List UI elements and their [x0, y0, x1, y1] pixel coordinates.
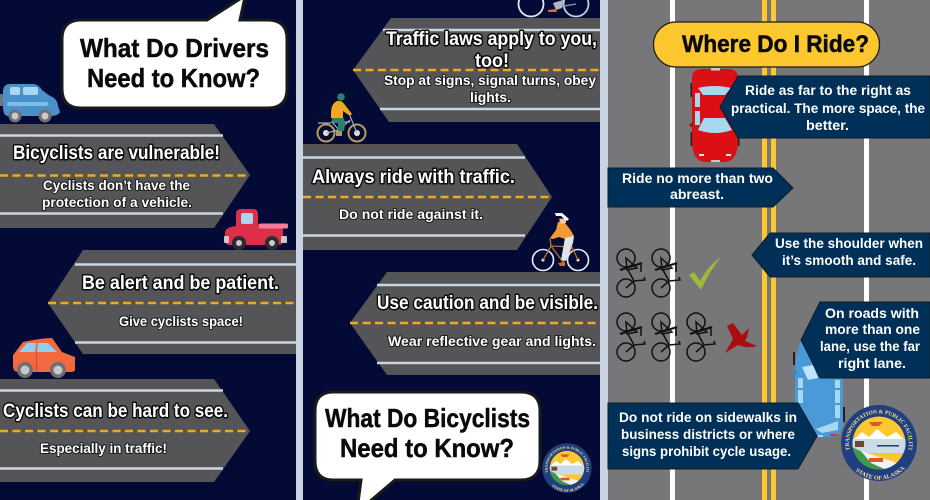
icon: Alaska DOT seal small: STATE OF ALASKA [552, 484, 584, 492]
speech bubble: drivers heading: Need to Know? [87, 63, 260, 93]
icon: Alaska DOT seal large [841, 405, 917, 481]
callout: no sidewalks: Do not ride on sidewalks in [619, 410, 797, 425]
road sign: bicyclists are vulnerable [0, 124, 250, 228]
road sign: cyclists can be hard to see: Especially in traffic! [40, 441, 167, 456]
callout: two abreast: Ride no more than two [622, 171, 773, 186]
road sign: traffic laws apply: Stop at signs, signal turns, obey [384, 72, 596, 88]
icon: red X mark [725, 323, 757, 353]
icon: cyclist in yellow jacket [318, 93, 366, 142]
callout: use the shoulder: it’s smooth and safe. [782, 253, 916, 268]
road sign: cyclists can be hard to see [0, 379, 250, 482]
road sign: always ride with traffic: Always ride with traffic. [312, 167, 515, 188]
heading pill: where do I ride: Where Do I Ride? [682, 31, 869, 58]
icon: Alaska DOT seal large: STATE OF ALASKA [856, 466, 905, 480]
road sign: use caution and be visible: Wear reflective gear and lights. [388, 334, 596, 349]
callout: two abreast: abreast. [670, 187, 724, 202]
road sign: always ride with traffic: Do not ride against it. [339, 207, 483, 222]
road sign: be alert and be patient: Give cyclists space! [119, 314, 243, 329]
icon: blue car [0, 84, 60, 122]
road sign: bicyclists are vulnerable: Bicyclists are vulnerable! [13, 143, 220, 164]
callout: far right lane: right lane. [838, 356, 906, 371]
panel: what bicyclists need to know [303, 0, 600, 500]
road sign: bicyclists are vulnerable: protection of a vehicle. [42, 195, 192, 210]
road sign: traffic laws apply: Traffic laws apply to you, [386, 29, 597, 50]
icon: bicycle pair allowed [617, 249, 680, 297]
road sign: cyclists can be hard to see: Cyclists can be hard to see. [3, 401, 228, 422]
icon: Alaska DOT seal large: TRANSPORTATION & PUBLIC FACILITIES [845, 410, 913, 451]
road sign: be alert and be patient: Be alert and be patient. [82, 273, 279, 294]
road sign: traffic laws apply [353, 18, 600, 122]
road sign: bicyclists are vulnerable: Cyclists don’t have the [43, 178, 190, 193]
callout: no sidewalks: business districts or where [621, 427, 795, 442]
speech bubble: drivers heading: What Do Drivers [80, 33, 269, 63]
callout: two abreast [608, 168, 793, 207]
panel: what drivers need to know [0, 0, 296, 500]
road sign: be alert and be patient [48, 250, 296, 354]
icon: orange car [13, 338, 75, 378]
road sign: always ride with traffic [303, 144, 552, 250]
callout: ride far right: Ride as far to the right as [745, 83, 911, 98]
callout: far right lane: lane, use the far [820, 339, 921, 354]
speech bubble: bicyclists heading: Need to Know? [340, 433, 514, 463]
road sign: traffic laws apply: lights. [470, 89, 511, 105]
road sign: traffic laws apply: too! [475, 51, 509, 72]
callout: far right lane: On roads with [825, 306, 919, 321]
divider between panels [296, 0, 304, 500]
icon: Alaska DOT seal small: TRANSPORTATION & PUBLIC FACILITIES [545, 446, 589, 473]
callout: far right lane [801, 302, 930, 378]
heading pill: where do I ride [654, 22, 880, 67]
callout: ride far right: practical. The more space, the [731, 101, 925, 116]
divider between panels [600, 0, 608, 500]
road sign: use caution and be visible: Use caution and be visible. [377, 293, 598, 314]
callout: use the shoulder: Use the shoulder when [775, 236, 923, 251]
icon: red pickup truck [224, 209, 288, 250]
callout: ride far right [720, 76, 930, 138]
icon: red car top view [690, 68, 740, 162]
icon: blue car top view [792, 338, 845, 437]
icon: cyclist at top edge [518, 0, 588, 16]
speech bubble: bicyclists heading: What Do Bicyclists [325, 403, 530, 433]
icon: three bicycles not allowed [617, 313, 715, 361]
speech bubble: bicyclists heading [315, 392, 540, 500]
callout: use the shoulder [752, 233, 930, 277]
callout: far right lane: more than one [825, 322, 920, 337]
callout: no sidewalks: signs prohibit cycle usage. [622, 444, 791, 459]
callout: ride far right: better. [806, 118, 849, 133]
callout: no sidewalks [608, 403, 817, 469]
icon: Alaska DOT seal small [542, 443, 592, 493]
icon: green check mark [689, 257, 721, 290]
icon: cyclist in orange top [532, 213, 588, 270]
panel: where do I ride [608, 0, 930, 500]
road markings [670, 0, 869, 500]
road sign: use caution and be visible [350, 272, 600, 375]
speech bubble: drivers heading [62, 0, 287, 108]
